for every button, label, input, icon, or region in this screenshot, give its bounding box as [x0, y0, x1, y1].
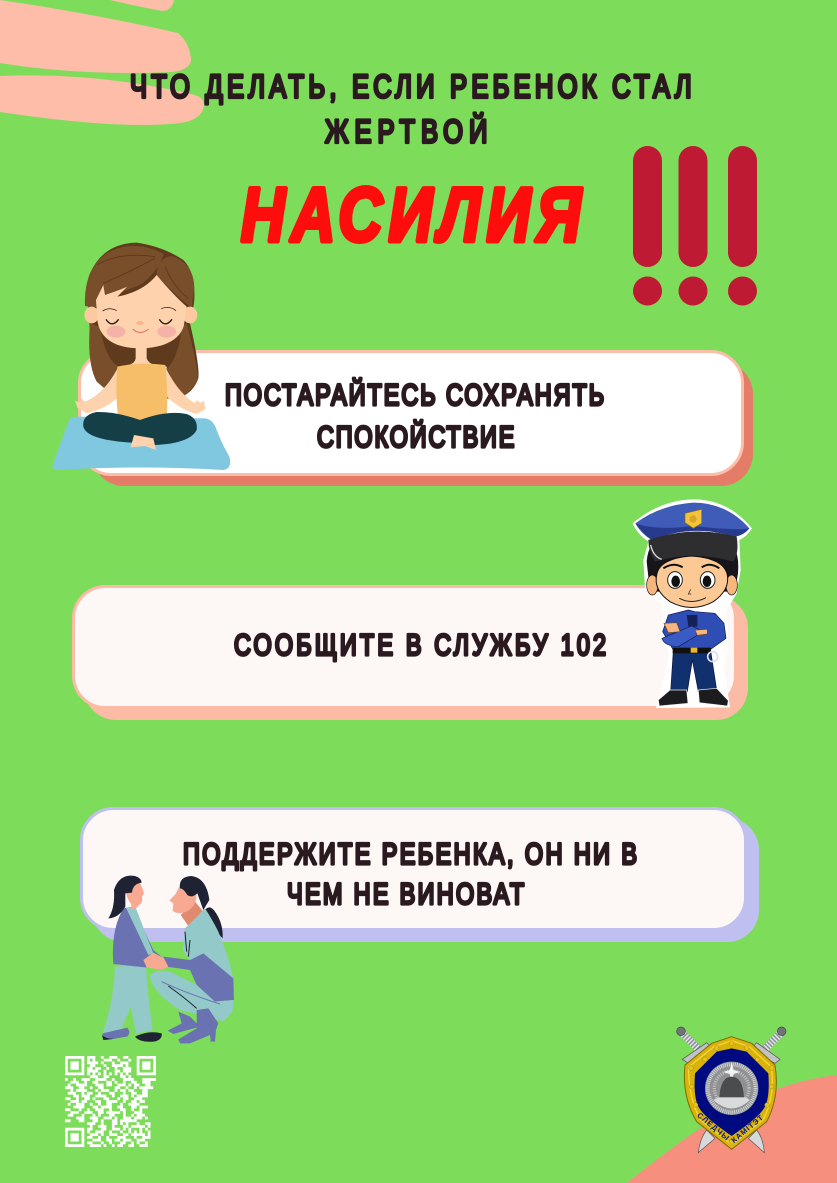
mother [143, 876, 234, 1043]
text: support the child: ПОДДЕРЖИТЕ РЕБЕНКА, ОН НИ В [183, 837, 637, 871]
daughter [102, 876, 163, 1042]
panel: support the child [82, 808, 759, 942]
text: support the child [183, 837, 637, 911]
text: stay calm: ПОСТАРАЙТЕСЬ СОХРАНЯТЬ [225, 377, 604, 412]
illustration: police officer [633, 499, 752, 708]
illustration: mother and daughter [102, 876, 234, 1043]
decoration: peach fingers [0, 0, 204, 125]
emblem text: КАМІТЭТ [731, 1114, 762, 1143]
crossed swords [677, 1027, 786, 1153]
emblem text [698, 1113, 762, 1143]
text: report to 102: СООБЩИТЕ В СЛУЖБУ 102 [234, 628, 606, 662]
emblem: investigative committee shield [676, 1026, 786, 1154]
coat of arms [705, 1062, 758, 1115]
icon: three exclamation marks [633, 146, 757, 306]
title [130, 70, 692, 150]
title: ЧТО ДЕЛАТЬ, ЕСЛИ РЕБЕНОК СТАЛ [130, 70, 692, 105]
QR code [65, 1057, 156, 1146]
heading: violence: НАСИЛИЯ [241, 173, 583, 258]
panel: report to 102 [74, 586, 748, 720]
illustration: meditating girl [52, 243, 230, 470]
panel: stay calm [80, 352, 753, 486]
emblem text: СЛЕДЧЫ [698, 1113, 730, 1140]
title: ЖЕРТВОЙ [325, 113, 487, 150]
text: support the child: ЧЕМ НЕ ВИНОВАТ [287, 877, 524, 911]
decoration: salmon corner [627, 1075, 837, 1183]
text: stay calm: СПОКОЙСТВИЕ [317, 419, 514, 454]
sticker outline [633, 499, 752, 708]
text: stay calm [225, 377, 604, 454]
